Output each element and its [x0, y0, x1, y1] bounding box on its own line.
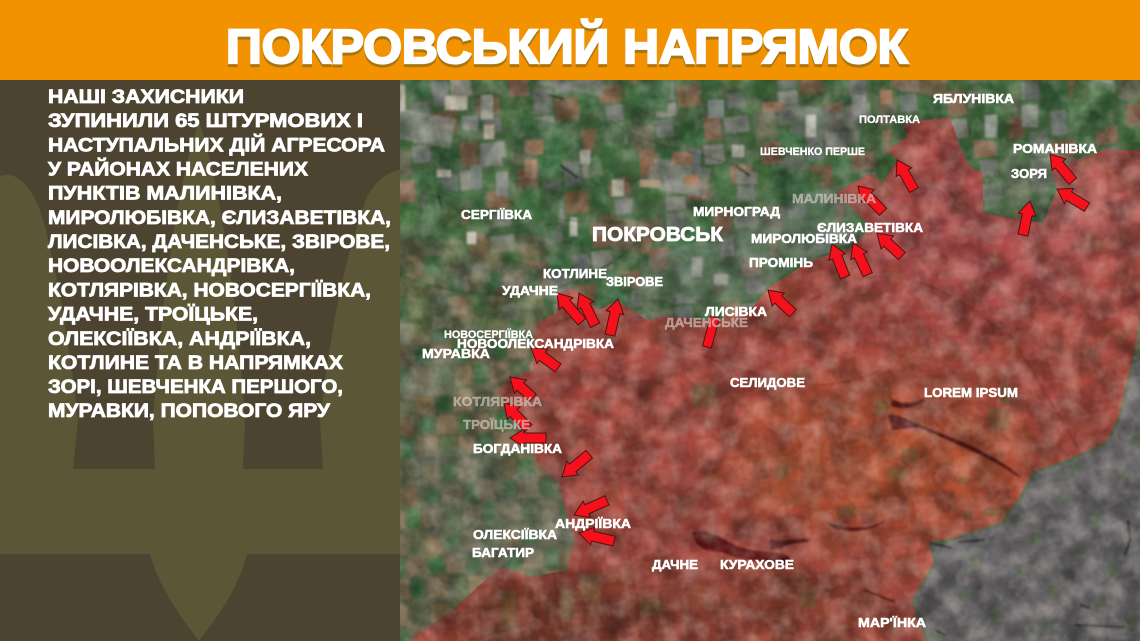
Donetsk urban area: gray zone	[913, 355, 1140, 641]
map place labels: НОВОСЕРГІЇВКА	[444, 328, 533, 341]
arrow: Andriivka north	[573, 495, 610, 518]
gray settlements	[640, 180, 860, 305]
map place labels: КОТЛЯРІВКА	[453, 394, 543, 409]
rivers and roads	[400, 240, 640, 295]
map place labels: ЛИСІВКА	[705, 304, 768, 319]
text block: defenders summary: МУРАВКИ, ПОПОВОГО ЯРУ	[48, 401, 330, 422]
arrow: Romanivka	[1049, 153, 1078, 185]
arrow: Kotliarivka	[504, 402, 532, 432]
text block: defenders summary: НАШІ ЗАХИСНИКИ	[48, 87, 244, 108]
text block: defenders summary: ЛИСІВКА, ДАЧЕНСЬКЕ, ЗВІРОВЕ,	[48, 232, 390, 253]
arrow: Lysivka	[703, 316, 719, 348]
arrow: Kotlyne	[576, 292, 600, 328]
arrow: Malynivka	[857, 185, 888, 216]
map place labels: ЗОРЯ	[1011, 166, 1047, 181]
text block: defenders summary: КОТЛЯРІВКА, НОВОСЕРГІЇВКА,	[48, 280, 371, 301]
text block: defenders summary: НОВООЛЕКСАНДРІВКА,	[48, 256, 295, 277]
map place labels: СЕЛИДОВЕ	[730, 375, 805, 390]
map place labels: ПОКРОВСЬК	[592, 224, 724, 246]
arrow: Troitske	[510, 429, 546, 447]
arrow: Zorya south	[1018, 200, 1037, 237]
text block: defenders summary: ЗУПИНИЛИ 65 ШТУРМОВИХ І	[48, 111, 363, 132]
text block: defenders summary: УДАЧНЕ, ТРОЇЦЬКЕ,	[48, 305, 258, 326]
arrow: Myroliubivka right	[850, 242, 873, 278]
text block: defenders summary: ЗОРІ, ШЕВЧЕНКА ПЕРШОГО,	[48, 377, 343, 398]
text block: defenders summary: ПУНКТІВ МАЛИНІВКА,	[48, 184, 282, 205]
arrow: Yelyzavetivka	[876, 232, 906, 260]
arrow: Bohdanivka	[561, 450, 593, 478]
arrow: Novooleksandrivka	[530, 348, 562, 373]
text block: defenders summary: ОЛЕКСІЇВКА, АНДРІЇВКА,	[48, 329, 311, 350]
map place labels: БОГДАНІВКА	[473, 441, 563, 456]
arrow: Andriivka south	[578, 526, 616, 546]
header bar	[0, 0, 1140, 80]
terrain mottling	[400, 80, 1140, 641]
red zone broad colour variation	[430, 150, 1140, 641]
map place labels: СЕРГІЇВКА	[461, 207, 533, 222]
map place labels: ЗВІРОВЕ	[606, 274, 663, 289]
map place labels: ОЛЕКСІЇВКА	[473, 527, 558, 542]
map place labels: МАР'ЇНКА	[858, 615, 927, 630]
arrow: Muravka direction	[509, 376, 537, 402]
arrow: Myroliubivka left	[828, 243, 850, 280]
title: ПОКРОВСЬКИЙ НАПРЯМОК	[226, 22, 909, 77]
map place labels	[422, 91, 1098, 630]
map place labels: ШЕВЧЕНКО ПЕРШЕ	[760, 146, 865, 158]
reservoir: central ravines	[887, 388, 1020, 478]
occupied zone: red area	[395, 105, 1140, 641]
arrow: Promin	[767, 289, 797, 318]
text block: defenders summary: НАСТУПАЛЬНИХ ДІЙ АГРЕСОРА	[48, 134, 385, 156]
map place labels: ТРОЇЦЬКЕ	[463, 417, 530, 432]
arrow: Udachne	[556, 292, 586, 326]
map place labels: ДАЧЕНСЬКЕ	[665, 315, 748, 330]
reservoir: Kurakhove	[692, 531, 790, 565]
olive fields in red zone	[500, 385, 1014, 630]
map place labels: МАЛИНІВКА	[792, 191, 877, 206]
map place labels: ПОЛТАВКА	[859, 114, 920, 126]
map place labels: ПРОМІНЬ	[749, 255, 813, 270]
map	[395, 75, 1140, 641]
text block: defenders summary: КОТЛИНЕ ТА В НАПРЯМКАХ	[48, 353, 343, 374]
map place labels: МУРАВКА	[422, 346, 491, 361]
map terrain: green farmland	[395, 75, 1140, 641]
arrow: Zorya east	[1056, 188, 1090, 212]
map place labels: КУРАХОВЕ	[720, 557, 794, 572]
text block: defenders summary: У РАЙОНАХ НАСЕЛЕНИХ	[48, 158, 308, 180]
arrow: Shevchenko Pershe	[896, 159, 919, 193]
map place labels: БАГАТИР	[472, 545, 534, 560]
text block: defenders summary	[48, 87, 391, 422]
map place labels: ЯБЛУНІВКА	[933, 91, 1015, 106]
arrows	[498, 148, 1092, 550]
map place labels: МИРНОГРАД	[693, 204, 781, 219]
map place labels: LOREM IPSUM	[924, 385, 1018, 400]
map place labels: ДАЧНЕ	[652, 557, 698, 572]
title: ПОКРОВСЬКИЙ НАПРЯМОК	[226, 19, 909, 74]
map place labels: РОМАНІВКА	[1013, 141, 1098, 156]
map place labels: АНДРІЇВКА	[555, 516, 632, 531]
map place labels: ЄЛИЗАВЕТІВКА	[817, 220, 924, 235]
text block: defenders summary: МИРОЛЮБІВКА, ЄЛИЗАВЕТІВКА,	[48, 208, 391, 229]
map place labels: КОТЛИНЕ	[543, 266, 607, 281]
left panel	[0, 80, 400, 641]
map place labels: УДАЧНЕ	[502, 283, 558, 298]
watermark: trident emblem	[0, 122, 400, 641]
map place labels: МИРОЛЮБІВКА	[751, 231, 858, 246]
arrow: Zvirove	[604, 298, 624, 337]
map place labels: НОВООЛЕКСАНДРІВКА	[457, 336, 615, 351]
